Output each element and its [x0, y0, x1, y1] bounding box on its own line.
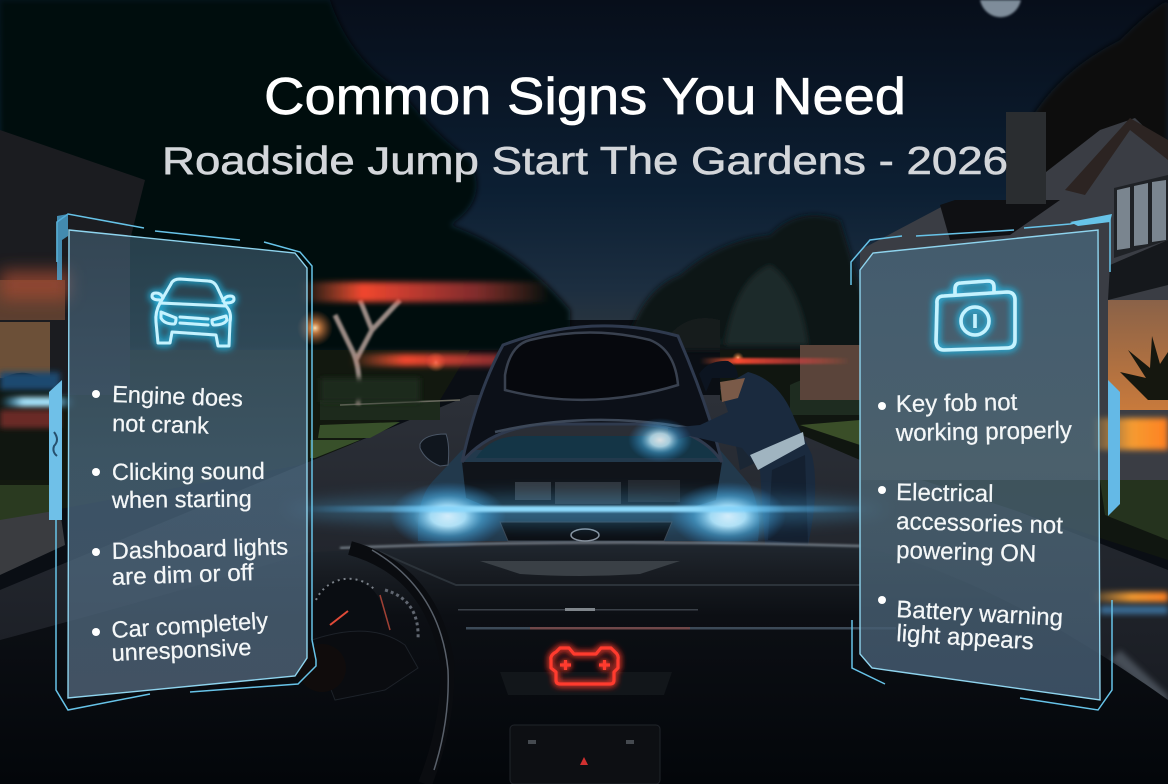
trees silhouette centre right — [625, 215, 880, 350]
console — [510, 725, 660, 784]
palm — [1120, 336, 1168, 400]
dashboard foreground — [0, 542, 1168, 784]
badge — [571, 529, 599, 541]
windscreen — [476, 436, 722, 458]
bullet: dashboard: are dim or off — [111, 559, 255, 590]
title — [162, 68, 1008, 183]
moon — [980, 0, 1021, 17]
bullet: unresponsive: Car completely — [111, 607, 269, 643]
bullet: clicking: Clicking sound — [112, 458, 265, 485]
bullet: electrical: powering ON — [896, 537, 1037, 568]
bullet: electrical: accessories not — [896, 508, 1064, 539]
trim line — [466, 627, 896, 630]
street lights — [297, 310, 744, 372]
lawns left — [0, 350, 470, 575]
grille — [500, 522, 672, 541]
bullet: electrical: Electrical — [896, 479, 994, 508]
bullet: engine: not crank — [112, 410, 209, 439]
light streaks — [0, 270, 850, 428]
icon: key fob — [936, 281, 1015, 350]
bullet: key fob: working properly — [895, 417, 1072, 447]
gauges — [311, 579, 418, 651]
icon: red battery warning light — [551, 648, 618, 684]
left bullet list — [92, 381, 288, 666]
bullet: unresponsive — [92, 607, 269, 666]
bullet: battery: light appears — [896, 620, 1034, 655]
bullet: engine: Engine does — [112, 381, 243, 412]
car with open hood — [418, 326, 759, 541]
bullet: clicking — [92, 458, 265, 513]
side streaks right — [1095, 418, 1168, 710]
panel frame — [851, 214, 1120, 710]
bullet: dashboard — [92, 533, 288, 590]
steering wheel — [298, 548, 448, 784]
lower panel — [500, 672, 672, 695]
light glows on car — [285, 418, 885, 550]
bullet: dashboard: Dashboard lights — [111, 533, 288, 564]
right bullet list — [878, 389, 1072, 655]
dash hump — [480, 561, 680, 576]
bullet: clicking: when starting — [111, 486, 252, 513]
mirror left — [420, 434, 449, 466]
icon: car — [152, 279, 234, 346]
bullet: battery — [878, 596, 1064, 655]
vent line — [458, 609, 698, 610]
trees silhouette left — [0, 0, 570, 350]
panel frame — [49, 214, 316, 710]
bullet: engine — [92, 381, 243, 439]
trees top right — [1030, 0, 1168, 200]
road — [0, 395, 1168, 784]
bullet: key fob: Key fob not — [896, 389, 1018, 418]
mirror right — [735, 440, 757, 470]
engine bay — [462, 462, 722, 508]
bullet: unresponsive: unresponsive — [111, 634, 252, 666]
hood — [462, 326, 722, 462]
heading line 2: Roadside Jump Start The Gardens - 2026 — [162, 140, 1008, 183]
lawns right — [720, 350, 1168, 560]
panel: right signs — [851, 214, 1120, 710]
house right — [800, 112, 1168, 480]
bullet: key fob — [878, 389, 1072, 447]
house left — [0, 130, 145, 480]
heading line 1: Common Signs You Need — [264, 68, 906, 126]
car body — [418, 450, 759, 541]
bullet: electrical — [878, 479, 1064, 568]
street tree — [335, 300, 400, 405]
technician — [668, 361, 815, 545]
dash top edge — [340, 542, 860, 548]
bullet: battery: Battery warning — [896, 596, 1064, 632]
panel: left signs — [49, 214, 316, 710]
